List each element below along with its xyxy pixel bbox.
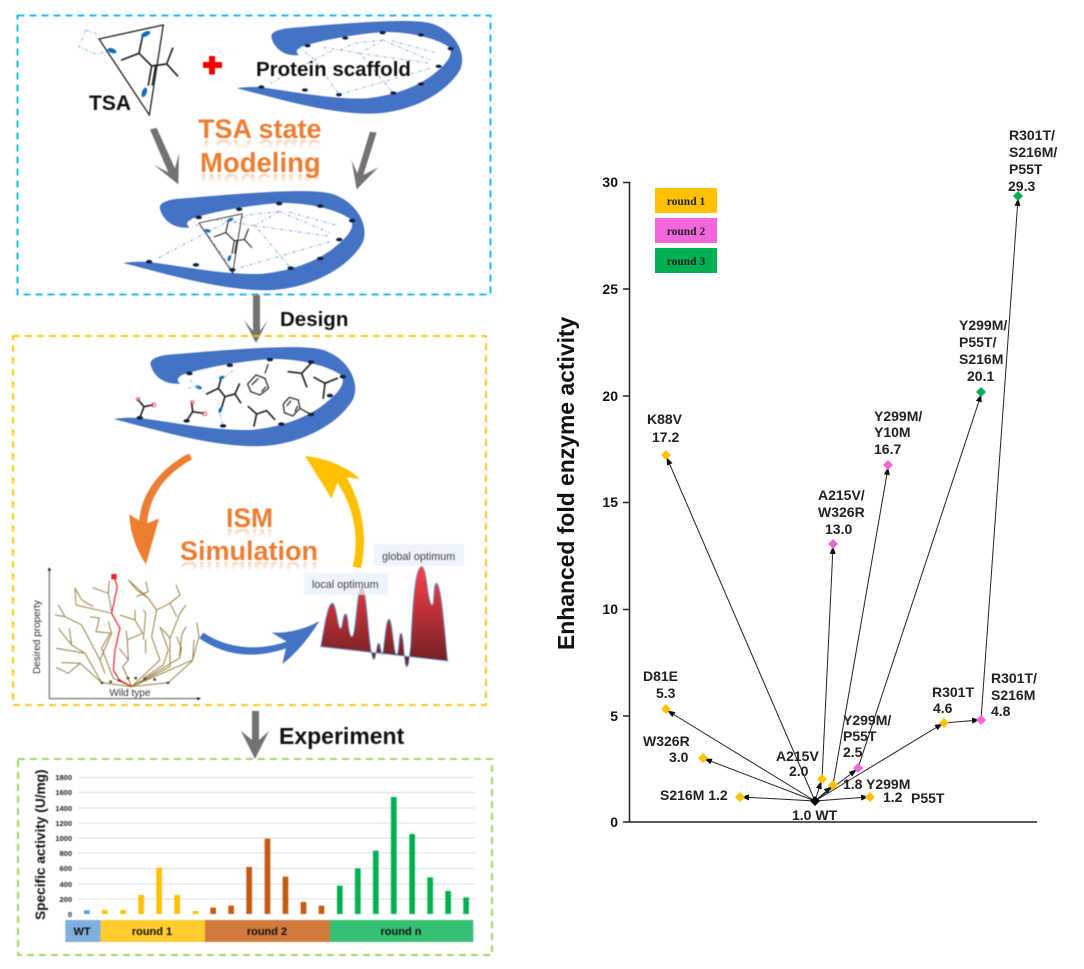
evolutionary tree plot — [32, 567, 201, 700]
variant labels: Y299M/ — [959, 317, 1007, 333]
variant labels: 2.0 — [789, 763, 809, 779]
variant labels: 16.7 — [874, 441, 901, 457]
variant labels: 3.0 — [669, 749, 689, 765]
variant labels: S216M — [959, 351, 1003, 367]
round 3 markers — [976, 191, 1023, 397]
round 2 markers — [828, 460, 986, 773]
heading: TSA state Modeling: Modeling — [200, 168, 321, 199]
gridlines and tick labels: 600 — [59, 864, 72, 873]
y-axis tick labels: 5 — [610, 708, 618, 724]
designed active-site scaffold — [114, 347, 355, 446]
gridlines and tick labels: 1800 — [55, 773, 72, 782]
gridlines and tick labels: 400 — [59, 880, 72, 889]
variant labels: 20.1 — [967, 368, 994, 384]
gridlines and tick labels: 1200 — [55, 819, 72, 828]
variant labels: Y299M/ — [874, 408, 922, 424]
variant labels: Y299M — [866, 776, 910, 792]
gridlines and tick labels: 800 — [59, 849, 72, 858]
protein scaffold shape — [237, 21, 462, 114]
bars — [84, 797, 469, 914]
label: Experiment: Experiment — [279, 723, 405, 749]
heading: ISM Simulation — [180, 503, 318, 586]
round 1 markers — [661, 450, 949, 802]
y-axis tick labels: 20 — [602, 388, 618, 404]
variant labels: 4.8 — [991, 703, 1011, 719]
arrow: scaffold to complex — [352, 132, 378, 189]
variant labels: S216M 1.2 — [660, 787, 728, 803]
variant labels: 29.3 — [1008, 178, 1035, 194]
variant labels: 13.0 — [825, 521, 852, 537]
label: Design: Design — [280, 308, 348, 331]
chart: enhanced fold enzyme activity — [553, 127, 1057, 830]
icon: red plus — [203, 56, 222, 74]
arrow: design — [244, 295, 268, 343]
variant labels: Y299M/ — [843, 712, 891, 728]
panel: TSA state modeling — [18, 16, 490, 294]
variant labels: R301T/ — [991, 670, 1037, 686]
round band — [65, 920, 473, 942]
variant labels: W326R — [643, 733, 690, 749]
variant labels: R301T/ — [1009, 127, 1055, 143]
label: TSA: TSA — [89, 92, 131, 115]
variant labels: R301T — [932, 684, 974, 700]
heading: ISM Simulation: ISM — [226, 523, 273, 553]
label: local optimum — [304, 573, 388, 595]
legend: round 2 — [667, 226, 705, 238]
arrow: yellow cycle — [305, 456, 364, 568]
label: local optimum: local optimum — [312, 579, 379, 591]
round band: round n — [381, 926, 422, 938]
arrow: experiment — [241, 711, 269, 759]
variant labels: 1.0 WT — [792, 807, 838, 823]
y-axis tick labels: 0 — [610, 814, 618, 830]
round band: round 1 — [132, 926, 172, 938]
y-axis title: Enhanced fold enzyme activity — [553, 316, 579, 650]
variant labels: P55T — [843, 728, 877, 744]
gridlines and tick labels: 0 — [68, 910, 72, 919]
variant labels: 1.8 — [843, 776, 863, 792]
variant labels: A215V — [776, 748, 819, 764]
legend — [655, 188, 717, 273]
heading: TSA state Modeling: TSA state — [198, 134, 322, 164]
heading: ISM Simulation: Simulation — [180, 556, 318, 586]
gridlines and tick labels — [55, 773, 475, 919]
gridlines and tick labels: 1000 — [55, 834, 72, 843]
y-axis tick labels: 25 — [602, 281, 618, 297]
variant labels: P55T — [911, 790, 945, 806]
heading: TSA state Modeling — [198, 114, 322, 199]
arrow: orange cycle — [129, 453, 192, 564]
y-axis tick labels: 10 — [602, 601, 618, 617]
legend: round 3 — [667, 256, 705, 268]
variant labels: 1.2 — [883, 789, 903, 805]
heading: TSA state Modeling: TSA state — [198, 114, 322, 144]
label: global optimum: global optimum — [382, 551, 455, 563]
wild type marker — [810, 796, 820, 806]
axes — [623, 182, 1037, 822]
gridlines and tick labels: 1400 — [55, 804, 72, 813]
arrows between variants — [667, 199, 1018, 801]
TSA molecule — [79, 25, 178, 115]
variant labels: K88V — [647, 411, 683, 427]
variant labels: D81E — [643, 668, 678, 684]
variant labels: W326R — [818, 504, 865, 520]
y-axis tick labels: 30 — [602, 174, 618, 190]
label: Wild type: Wild type — [109, 688, 151, 699]
variant labels: A215V/ — [818, 487, 865, 503]
heading: TSA state Modeling: Modeling — [200, 147, 321, 178]
panel: ISM simulation — [13, 336, 486, 705]
variant labels — [643, 127, 1057, 823]
y-axis tick labels: 15 — [602, 494, 618, 510]
variant labels: P55T — [1009, 161, 1043, 177]
variant labels: Y10M — [874, 424, 911, 440]
y-axis tick labels — [602, 174, 618, 830]
y-axis title: Specific activity (U/mg) — [33, 769, 48, 920]
variant labels: 5.3 — [656, 685, 676, 701]
round band: WT — [73, 926, 91, 938]
fitness landscape — [321, 567, 448, 667]
variant labels: 17.2 — [652, 429, 679, 445]
heading: ISM Simulation: Simulation — [180, 536, 318, 566]
gridlines and tick labels: 1600 — [55, 788, 72, 797]
variant labels: S216M/ — [1009, 144, 1057, 160]
variant labels: S216M — [991, 687, 1035, 703]
variant labels: 2.5 — [843, 744, 863, 760]
label: Desired property: Desired property — [32, 600, 43, 674]
variant labels: 4.6 — [933, 700, 953, 716]
arrow: TSA to complex — [150, 128, 179, 184]
gridlines and tick labels: 200 — [59, 895, 72, 904]
heading: ISM Simulation: ISM — [226, 503, 273, 533]
round band: round 2 — [247, 926, 287, 938]
variant labels: P55T/ — [959, 334, 996, 350]
arrow: blue cycle — [199, 621, 319, 664]
complex of TSA in protein scaffold — [123, 191, 365, 290]
label: global optimum — [374, 544, 464, 566]
label: Protein scaffold: Protein scaffold — [256, 58, 411, 81]
legend: round 1 — [667, 196, 705, 208]
panel: specific activity bar chart — [18, 759, 492, 955]
